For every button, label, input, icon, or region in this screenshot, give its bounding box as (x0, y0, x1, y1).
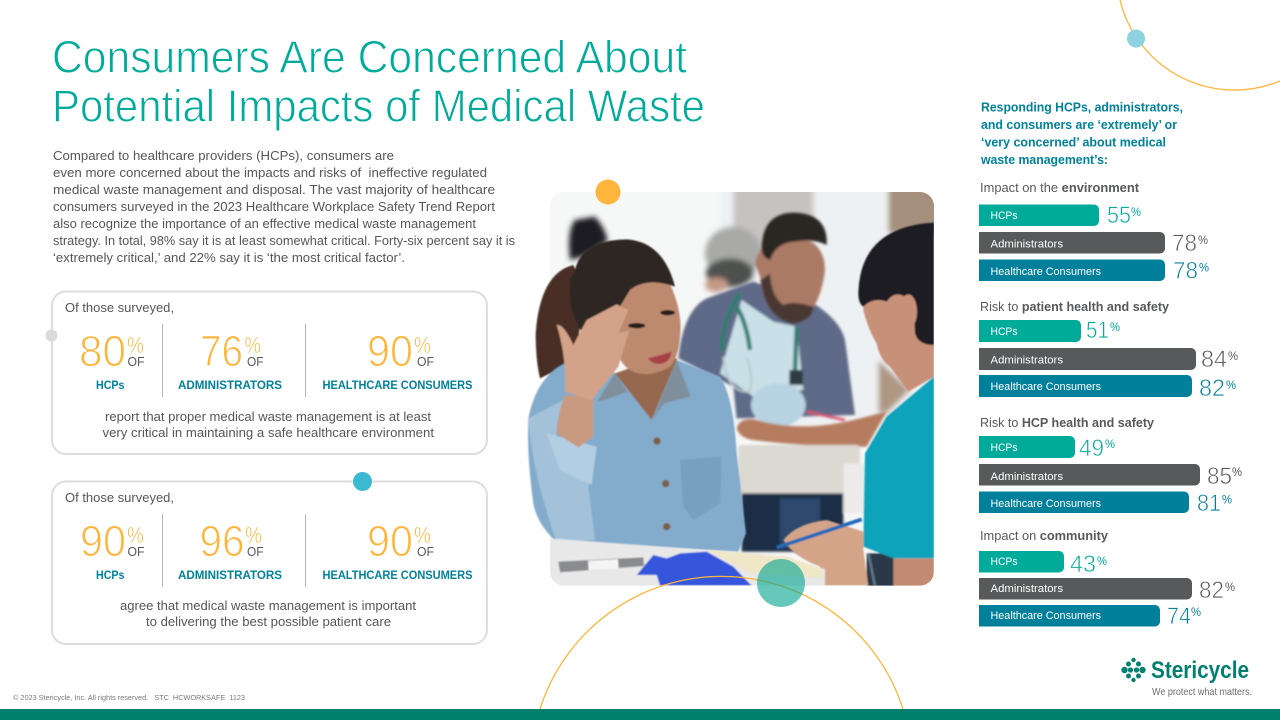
panel conclusion text: agree that medical waste management is important (120, 598, 416, 613)
panel intro text: Of those surveyed, (65, 300, 174, 315)
panel conclusion text: report that proper medical waste management is at least (105, 409, 431, 424)
icon: blue dot (353, 472, 372, 491)
icon: grey dot (46, 330, 58, 342)
panel conclusion text: to delivering the best possible patient care (146, 614, 391, 629)
bar: Administrators 82%: Administrators (990, 583, 1063, 595)
stat: administrators 76% (178, 327, 282, 392)
bar: Healthcare Consumers 81%: 81 (1197, 490, 1221, 517)
bar: Healthcare Consumers 81%: Healthcare Consumers (990, 498, 1101, 510)
stat: administrators 96%: OF (247, 545, 264, 559)
bar: HCPs 49%: 49 (1079, 435, 1104, 462)
stat: healthcare consumers 90%: 90 (367, 327, 413, 376)
stat: administrators 96%: ADMINISTRATORS (178, 568, 282, 582)
bar: Healthcare Consumers 74%: 74 (1167, 603, 1191, 630)
stat: HCPs 80% (79, 327, 145, 392)
bar: HCPs 55%: 55 (1107, 202, 1131, 229)
bar: Administrators 85%: 85 (1207, 463, 1232, 490)
stat: administrators 76%: ADMINISTRATORS (178, 378, 282, 392)
bar: Healthcare Consumers 78%: 78 (1173, 258, 1198, 284)
bar: Administrators 84%: 84 (1201, 346, 1227, 373)
bar: Healthcare Consumers 82%: Healthcare Consumers (990, 381, 1101, 393)
stat: administrators 96%: 96 (200, 517, 244, 566)
bar: HCPs 43%: % (1097, 554, 1107, 568)
bar: Administrators 78%: 78 (1172, 230, 1197, 257)
intro paragraph: consumers surveyed in the 2023 Healthcare Workplace Safety Trend Report (53, 199, 495, 214)
panel conclusion text (120, 598, 416, 629)
stat: HCPs 90%: OF (128, 545, 145, 559)
stat: healthcare consumers 90%: HEALTHCARE CONSUMERS (322, 568, 473, 582)
icon: teal dot (757, 559, 805, 607)
stat: HCPs 80%: HCPs (96, 378, 125, 392)
bar: HCPs 51%: 51 (1086, 317, 1109, 344)
logo: Stericycle (1121, 657, 1252, 698)
bar: HCPs 51%: HCPs (990, 326, 1018, 338)
icon: logo dots (1121, 658, 1146, 682)
panel intro text: Of those surveyed, (65, 490, 174, 505)
stat: healthcare consumers 90%: % (414, 522, 431, 548)
bar: Healthcare Consumers 81% (979, 490, 1232, 517)
stat: administrators 76%: 76 (200, 327, 243, 376)
intro paragraph: strategy. In total, 98% say it is at least somewhat critical. Forty-six percent say it is (53, 233, 515, 248)
intro paragraph: Compared to healthcare providers (HCPs), consumers are (53, 148, 394, 163)
bar: HCPs 43%: HCPs (990, 556, 1018, 568)
bar chart: risk to HCP health and safety: Risk to HCP health and safety (980, 415, 1155, 430)
stat: HCPs 80%: OF (128, 355, 145, 369)
chart heading: Responding HCPs, administrators, (981, 100, 1183, 114)
bar: Administrators 82%: 82 (1199, 577, 1224, 604)
stat: administrators 76%: % (244, 332, 261, 358)
stat: HCPs 90%: HCPs (96, 568, 125, 582)
stat: healthcare consumers 90%: HEALTHCARE CONSUMERS (322, 378, 473, 392)
chart heading: ‘very concerned’ about medical (981, 134, 1166, 150)
chart heading: and consumers are ‘extremely’ or (981, 117, 1177, 132)
bar: Healthcare Consumers 82%: % (1226, 378, 1236, 392)
bar: HCPs 43% (979, 551, 1107, 578)
stat: administrators 96%: % (245, 522, 262, 548)
bar chart: impact on the environment: Impact on the environment (980, 180, 1140, 195)
stat: HCPs 80%: % (127, 332, 144, 358)
nurse in foreground (777, 223, 934, 587)
arc: bottom orange curve (540, 576, 903, 709)
stat: HCPs 90%: % (127, 522, 144, 548)
footer copyright: © 2023 Stericycle, Inc. All rights reserved. STC HCWORKSAFE 1123 (13, 693, 245, 702)
title (52, 32, 705, 132)
stat: HCPs 80%: 80 (79, 327, 126, 376)
bar: Healthcare Consumers 78%: Healthcare Consumers (990, 266, 1101, 278)
bar: HCPs 43%: 43 (1070, 551, 1096, 578)
bar: Healthcare Consumers 74%: Healthcare Consumers (990, 610, 1101, 622)
bar: Administrators 78%: Administrators (990, 238, 1063, 250)
bar: HCPs 49%: % (1105, 437, 1115, 451)
woman with hand to forehead (528, 239, 746, 552)
bar chart: impact on community (979, 528, 1235, 630)
bar: Administrators 82% (979, 577, 1235, 604)
icon: blue dot top right (1127, 30, 1145, 48)
bar chart: impact on community: Impact on community (980, 528, 1109, 543)
bar: Administrators 85% (979, 463, 1242, 490)
footer bar (0, 709, 1280, 720)
stat: HCPs 90%: 90 (80, 517, 126, 566)
bar: Administrators 82%: % (1225, 580, 1235, 594)
stat: administrators 76%: OF (247, 355, 264, 369)
bar: Healthcare Consumers 74% (979, 603, 1201, 630)
chart heading: waste management’s: (980, 152, 1108, 167)
stat: healthcare consumers 90% (322, 517, 473, 582)
man in background (678, 282, 855, 418)
logo: Stericycle: We protect what matters. (1152, 687, 1252, 698)
intro paragraph (53, 148, 515, 265)
bar: HCPs 55%: % (1131, 205, 1141, 219)
intro paragraph: even more concerned about the impacts and risks of ineffective regulated (53, 165, 487, 180)
bar: Administrators 78%: % (1198, 233, 1208, 247)
bar chart: risk to HCP health and safety (979, 415, 1242, 517)
bar: Administrators 84%: Administrators (990, 354, 1063, 366)
bar chart: risk to patient health and safety: Risk to patient health and safety (980, 299, 1170, 314)
bar: HCPs 51% (979, 317, 1120, 344)
bar: HCPs 49% (979, 435, 1115, 462)
bar: Healthcare Consumers 78%: % (1199, 260, 1209, 274)
bar: Healthcare Consumers 78% (979, 258, 1209, 284)
table with marker, gloves and paper (550, 538, 825, 587)
bar chart: impact on the environment (979, 180, 1209, 284)
bar: Administrators 84% (979, 346, 1238, 373)
stat: healthcare consumers 90%: OF (417, 545, 434, 559)
bar: Healthcare Consumers 81%: % (1222, 492, 1232, 506)
bar chart: risk to patient health and safety (979, 299, 1238, 402)
panel conclusion text: very critical in maintaining a safe healthcare environment (102, 425, 434, 440)
panel: important to patient care (52, 472, 487, 644)
panel conclusion text (102, 409, 434, 440)
bar: HCPs 55% (979, 202, 1141, 229)
bar: HCPs 55%: HCPs (990, 210, 1018, 222)
stat: HCPs 90% (80, 517, 145, 582)
stat: healthcare consumers 90%: OF (417, 355, 434, 369)
bar: Administrators 78% (979, 230, 1208, 257)
stat: healthcare consumers 90%: 90 (367, 517, 413, 566)
stat: healthcare consumers 90%: % (414, 332, 431, 358)
intro paragraph: also recognize the importance of an effective medical waste management (53, 216, 476, 231)
intro paragraph: medical waste management and disposal. The vast majority of healthcare (53, 182, 495, 197)
stat: administrators 96% (178, 517, 282, 582)
bar: Administrators 84%: % (1228, 349, 1238, 363)
bar: HCPs 51%: % (1110, 320, 1120, 334)
title: Potential Impacts of Medical Waste (52, 80, 705, 132)
bar: HCPs 49%: HCPs (990, 442, 1018, 454)
title: Consumers Are Concerned About (52, 32, 687, 82)
bar: Healthcare Consumers 82%: 82 (1199, 375, 1225, 402)
photo: concerned patient talking with nurse (528, 187, 940, 587)
bar: Healthcare Consumers 74%: % (1191, 605, 1201, 619)
bar: Healthcare Consumers 82% (979, 375, 1236, 402)
arc: top right orange curve (1120, 0, 1280, 90)
bar: Administrators 85%: Administrators (990, 471, 1063, 483)
bar: Administrators 85%: % (1232, 465, 1242, 479)
logo: Stericycle: Stericycle (1151, 657, 1249, 684)
stat: healthcare consumers 90% (322, 327, 473, 392)
icon: orange dot (596, 180, 620, 204)
panel: critical for safe environment (46, 292, 487, 454)
intro paragraph: ‘extremely critical,’ and 22% say it is ‘the most critical factor’. (53, 250, 405, 265)
chart heading (980, 100, 1183, 167)
